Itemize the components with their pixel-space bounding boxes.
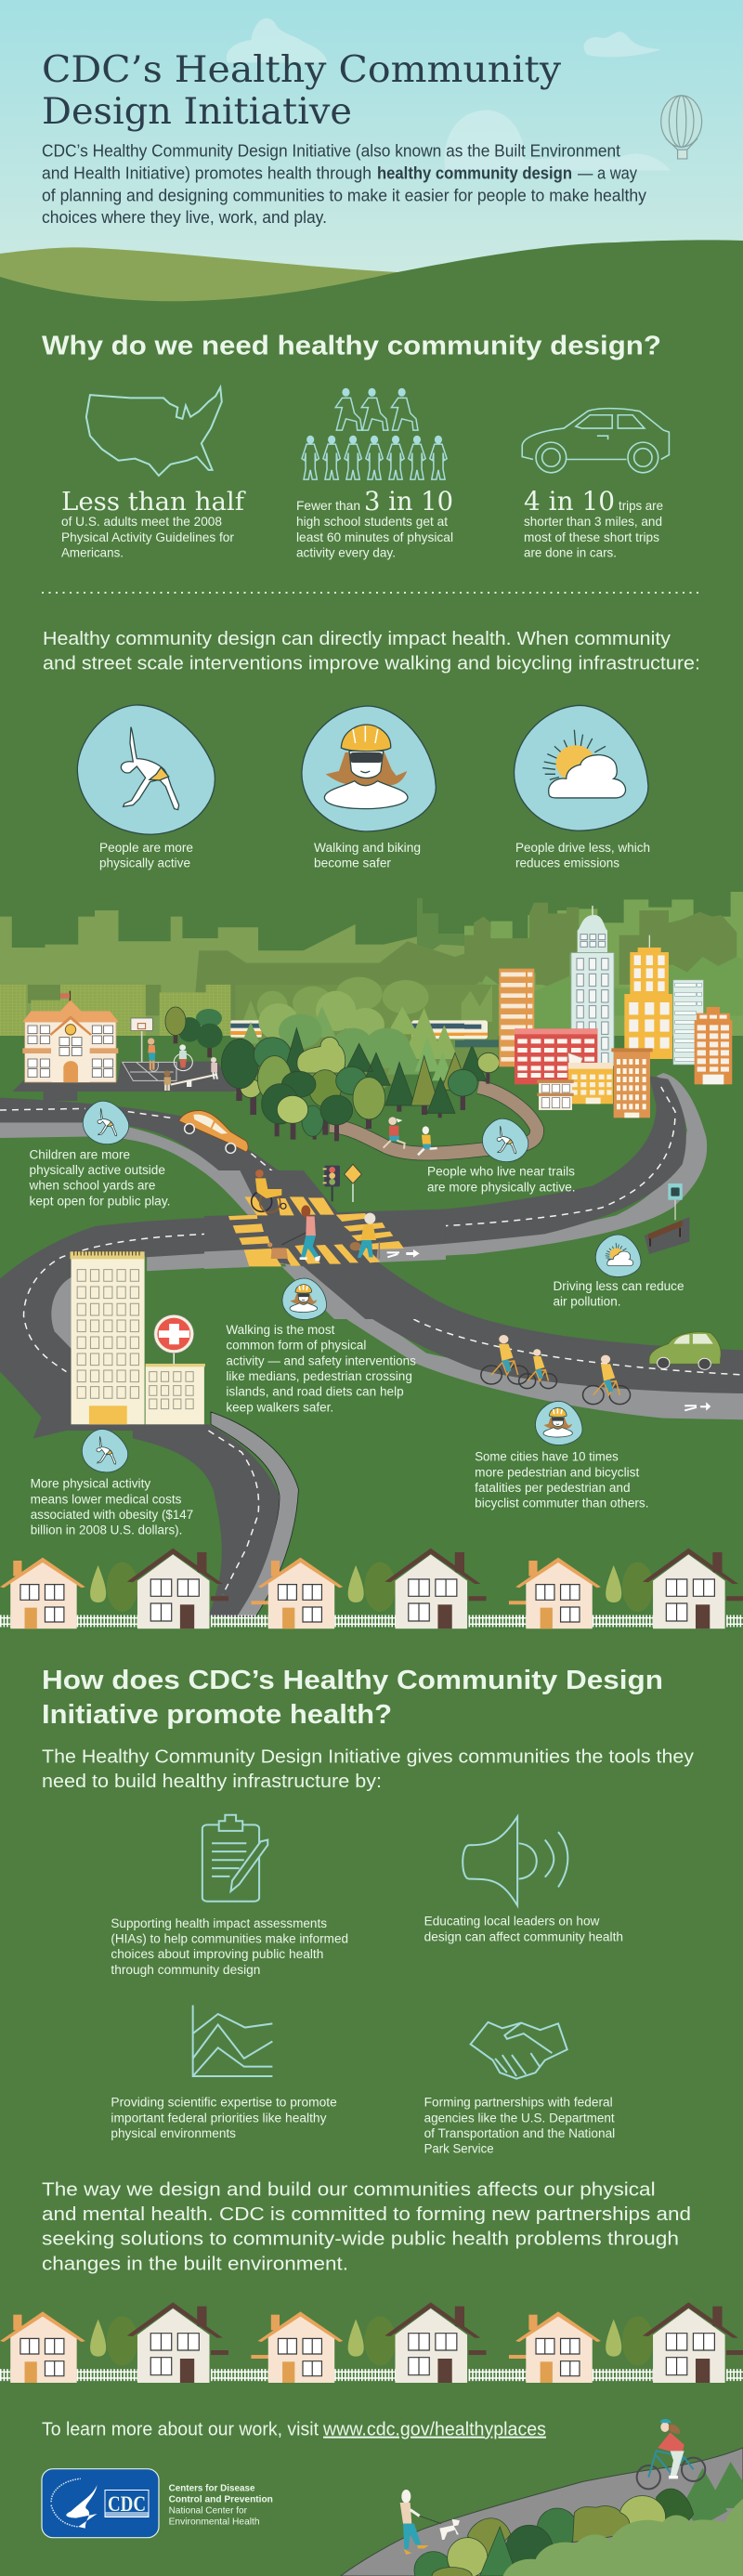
label: school yards: when school yards are: [28, 1179, 155, 1193]
label: school yards: kept open for public play.: [30, 1194, 171, 1208]
far right orange building: [695, 1007, 732, 1084]
road: upper to lower asphalt: [0, 1098, 743, 1393]
label: trails: [427, 1165, 576, 1194]
icon: mini yoga blob trail: [482, 1118, 528, 1162]
red building: [515, 1028, 597, 1084]
agency name: [169, 2483, 273, 2527]
cyclist child: [519, 1349, 556, 1389]
intro paragraph: CDC’s Healthy Community Design Initiative (also known as the Built Environment: [42, 141, 620, 160]
label: medical costs: means lower medical costs: [31, 1492, 182, 1506]
closing paragraph: The way we design and build our communities affects our physical: [42, 2179, 656, 2200]
icon: bench: [645, 1217, 689, 1254]
crosswalk: [228, 1196, 404, 1266]
item: partnerships: Forming partnerships with federal: [424, 2096, 613, 2109]
right skyline: [464, 892, 743, 1053]
orange striped building: [499, 969, 534, 1066]
icon: mini helmet blob cities: [535, 1401, 582, 1445]
icon: mini yoga blob: [83, 1101, 129, 1144]
item: educating leaders: Educating local leaders on how: [424, 1915, 600, 1929]
caption: physically active: [99, 841, 193, 870]
road: left inner sidewalk: [51, 1277, 72, 1349]
stat: 4 in 10: are done in cars.: [524, 544, 617, 559]
item: scientific expertise: Providing scientific expertise to promote: [111, 2096, 337, 2109]
rail: [455, 1040, 499, 1047]
label: medical costs: associated with obesity ($147: [31, 1508, 193, 1522]
label: school yards: Children are more: [30, 1148, 130, 1161]
pale blue building: [673, 980, 703, 1065]
tools paragraph: The Healthy Community Design Initiative gives communities the tools they: [42, 1746, 694, 1767]
label: air pollution: Driving less can reduce: [554, 1279, 684, 1293]
icon: hospital: [71, 1251, 205, 1424]
footer scene: [341, 2419, 743, 2576]
tools paragraph: need to build healthy infrastructure by:: [42, 1772, 382, 1792]
train end and rail: [464, 1021, 499, 1047]
closing paragraph: seeking solutions to community-wide public health problems through: [42, 2229, 679, 2250]
cream small building: [537, 1079, 574, 1110]
learn more link: www.cdc.gov/healthyplaces: [322, 2420, 546, 2440]
orange tall building: [611, 1048, 653, 1118]
item: health impact assessments: choices about improving public health: [111, 1947, 323, 1961]
walker with dog: [267, 1205, 320, 1261]
heading: how: Initiative promote health?: [42, 1700, 392, 1730]
title: Design Initiative: [42, 91, 352, 133]
icon: mini sun blob: [595, 1235, 641, 1277]
stat: 4 in 10: [522, 409, 669, 559]
cyclists: [481, 1335, 528, 1384]
stat: 4 in 10: trips are: [619, 498, 663, 513]
stat: less than half: Less than half: [61, 488, 246, 517]
back hill: [0, 247, 398, 316]
stat: 3 in 10: [296, 388, 453, 559]
scene ground: [0, 1036, 743, 1630]
clouds: [227, 19, 671, 171]
caption: safer: become safer: [314, 856, 392, 870]
yellow low building: [568, 1053, 613, 1104]
icon: orange car: [179, 1111, 248, 1153]
item: partnerships: Park Service: [424, 2141, 494, 2155]
tower: [571, 906, 614, 1066]
cyclist: [637, 2419, 705, 2489]
schoolyard and school: [12, 991, 248, 1153]
front mass: [503, 2499, 743, 2576]
caption: emissions: People drive less, which: [515, 841, 650, 855]
forest backdrop and train: [230, 977, 499, 1093]
icon: mini helmet blob: [282, 1278, 327, 1320]
item: educating leaders: design can affect community health: [424, 1930, 623, 1944]
roads: [0, 1073, 743, 1424]
road: crossing asphalt: [0, 1076, 686, 1424]
icon: green car: [649, 1332, 721, 1369]
caption: physically active: People are more: [99, 841, 193, 855]
train: [230, 1020, 488, 1039]
older walker: [350, 1213, 379, 1259]
agency name: Control and Prevention: [169, 2493, 273, 2504]
stat: less than half: [61, 387, 246, 559]
CDC logo: [42, 2469, 159, 2538]
label: medical costs: More physical activity: [31, 1477, 150, 1491]
icon: school: [22, 991, 119, 1082]
stat: 4 in 10: most of these short trips: [524, 530, 659, 544]
intro paragraph: — a way: [578, 163, 638, 182]
tools paragraph: [42, 1746, 694, 1792]
label: walking: activity — and safety interventions: [226, 1353, 416, 1367]
item: partnerships: [424, 2022, 615, 2155]
label: walking: islands, and road diets can help: [226, 1385, 404, 1399]
label: medical costs: billion in 2008 U.S. dollars).: [31, 1523, 182, 1537]
item: health impact assessments: [111, 1815, 348, 1977]
houses row one: [0, 1549, 743, 1628]
caption: safer: Walking and biking: [314, 841, 421, 855]
caption: safer: [314, 841, 421, 870]
heading: how: [42, 1666, 663, 1730]
road: right sidewalk: [147, 1073, 707, 1271]
icon: HHS eagle: [51, 2478, 98, 2529]
icon: basketball hoop: [131, 1018, 152, 1062]
stat: 3 in 10: 3 in 10: [364, 486, 453, 517]
caption: emissions: reduces emissions: [515, 856, 619, 870]
closing paragraph: [42, 2179, 691, 2274]
stat: less than half: of U.S. adults meet the 2008: [61, 514, 222, 529]
tree layer: [414, 2462, 743, 2576]
stat: 4 in 10: 4 in 10: [524, 486, 615, 517]
intro paragraph: [42, 141, 647, 227]
label: fatalities: [475, 1450, 648, 1510]
city foreground buildings: [464, 906, 732, 1118]
learn more link: [42, 2420, 546, 2440]
item: partnerships: agencies like the U.S. Department: [424, 2111, 615, 2125]
intersection: [204, 1170, 446, 1319]
label: fatalities: fatalities per pedestrian and: [475, 1481, 631, 1495]
runners: [384, 1117, 437, 1155]
intro paragraph: of planning and designing communities to make it easier for people to make healthy: [42, 186, 647, 204]
icon: pedestrian sign: [345, 1164, 361, 1202]
item: scientific expertise: physical environments: [111, 2126, 236, 2140]
item: scientific expertise: important federal priorities like healthy: [111, 2111, 327, 2125]
label: walking: [226, 1323, 416, 1414]
icon: students: [302, 388, 447, 479]
stat: 3 in 10: Fewer than: [296, 498, 360, 513]
closing paragraph: and mental health. CDC is committed to forming new partnerships and: [42, 2204, 691, 2225]
label: walking: common form of physical: [226, 1339, 366, 1353]
icon: line chart: [193, 2005, 272, 2076]
trail: [330, 1087, 537, 1154]
caption: physically active: physically active: [99, 856, 190, 870]
icon: megaphone: [463, 1817, 567, 1905]
intro paragraph: and Health Initiative) promotes health through: [42, 163, 372, 182]
forest and trail: [221, 1028, 537, 1155]
item: educating leaders: [424, 1817, 623, 1944]
closing paragraph: changes in the built environment.: [42, 2254, 348, 2274]
court: [123, 1062, 176, 1080]
impact paragraph: [43, 629, 700, 674]
agency name: National Center for: [169, 2504, 247, 2516]
label: fatalities: Some cities have 10 times: [475, 1450, 619, 1464]
item: health impact assessments: (HIAs) to help communities make informed: [111, 1932, 348, 1945]
icon: traffic light: [323, 1166, 342, 1201]
road: bottom curve sidewalk: [211, 1412, 298, 1616]
stat: less than half: Americans.: [61, 544, 124, 559]
lot: [12, 1062, 239, 1092]
icon: yoga blob: [77, 705, 215, 834]
label: fatalities: bicyclist commuter than others.: [475, 1497, 648, 1510]
path: [341, 2448, 743, 2576]
road: upper left sidewalk: [0, 1122, 256, 1223]
icon: car: [522, 409, 669, 473]
header panel: sky and hills: [0, 0, 743, 316]
children playing: [148, 1038, 217, 1091]
intersection pavement: [204, 1170, 446, 1319]
label: medical costs: [31, 1477, 193, 1537]
label: air pollution: [554, 1279, 684, 1309]
label: school yards: [28, 1148, 170, 1208]
caption: emissions: [515, 841, 650, 870]
left buildings: [0, 985, 230, 1038]
walker and dog: [400, 2490, 460, 2555]
label: walking: like medians, pedestrian crossing: [226, 1369, 412, 1383]
impact paragraph: Healthy community design can directly impact health. When community: [43, 629, 671, 649]
bike lane marker: [387, 1249, 420, 1258]
item: scientific expertise: [111, 2005, 337, 2140]
cyclist adult: [583, 1355, 631, 1405]
tree cluster: [165, 1007, 223, 1057]
road: bottom curve asphalt: [133, 1424, 280, 1616]
intro paragraph: healthy community design: [377, 163, 572, 182]
label: school yards: physically active outside: [30, 1163, 165, 1177]
icon: bus stop: [668, 1183, 683, 1220]
bike lane marker lower: [684, 1402, 710, 1411]
icon: clipboard: [202, 1815, 267, 1902]
road markings: [0, 1087, 743, 1595]
label: walking: Walking is the most: [226, 1323, 335, 1337]
icon: mini yoga blob hospital: [82, 1430, 128, 1472]
learn more link: To learn more about our work, visit: [42, 2420, 319, 2440]
label: fatalities: more pedestrian and bicyclist: [475, 1465, 640, 1479]
CDC logo: CDC: [108, 2492, 146, 2516]
icon: cyclist woman blob: [302, 706, 436, 831]
icon: sun and cloud blob: [515, 705, 648, 830]
label: walking: keep walkers safer.: [226, 1400, 333, 1414]
road: lower sweep sidewalk: [284, 1263, 743, 1419]
icon: handshake: [471, 2022, 567, 2079]
label: trails: are more physically active.: [427, 1180, 576, 1194]
item: partnerships: of Transportation and the National: [424, 2126, 615, 2140]
city skyline: [0, 892, 743, 1059]
icon: hot air balloon: [661, 96, 702, 159]
label: trails: People who live near trails: [427, 1165, 575, 1179]
heading: how: How does CDC’s Healthy Community Design: [42, 1666, 663, 1695]
front hill: [0, 240, 743, 316]
stat: 3 in 10: least 60 minutes of physical: [296, 530, 453, 544]
left skyline: [0, 898, 464, 1059]
agency name: Centers for Disease: [169, 2483, 255, 2494]
sidewalks: [204, 1170, 446, 1319]
street objects: [323, 1164, 361, 1202]
yellow building: [624, 935, 672, 1059]
icon: US map: [86, 387, 222, 476]
title: CDC’s Healthy Community: [42, 49, 561, 91]
impact paragraph: and street scale interventions improve walking and bicycling infrastructure:: [43, 654, 700, 674]
title: [42, 49, 561, 133]
stat: 3 in 10: high school students get at: [296, 514, 448, 529]
trees: [221, 1028, 500, 1155]
heading: why: Why do we need healthy community design?: [42, 331, 661, 360]
stat: 4 in 10: shorter than 3 miles, and: [524, 514, 662, 529]
houses row two: [0, 2302, 743, 2383]
stat: 3 in 10: activity every day.: [296, 544, 396, 559]
agency name: Environmental Health: [169, 2516, 260, 2527]
item: health impact assessments: through community design: [111, 1963, 260, 1977]
stat: less than half: Physical Activity Guidelines for: [61, 530, 234, 544]
intro paragraph: choices where they live, work, and play.: [42, 207, 327, 227]
item: health impact assessments: Supporting health impact assessments: [111, 1916, 327, 1930]
label: air pollution: air pollution.: [554, 1295, 620, 1309]
road: left lot: [33, 1366, 137, 1438]
wheelchair user: [252, 1170, 286, 1212]
